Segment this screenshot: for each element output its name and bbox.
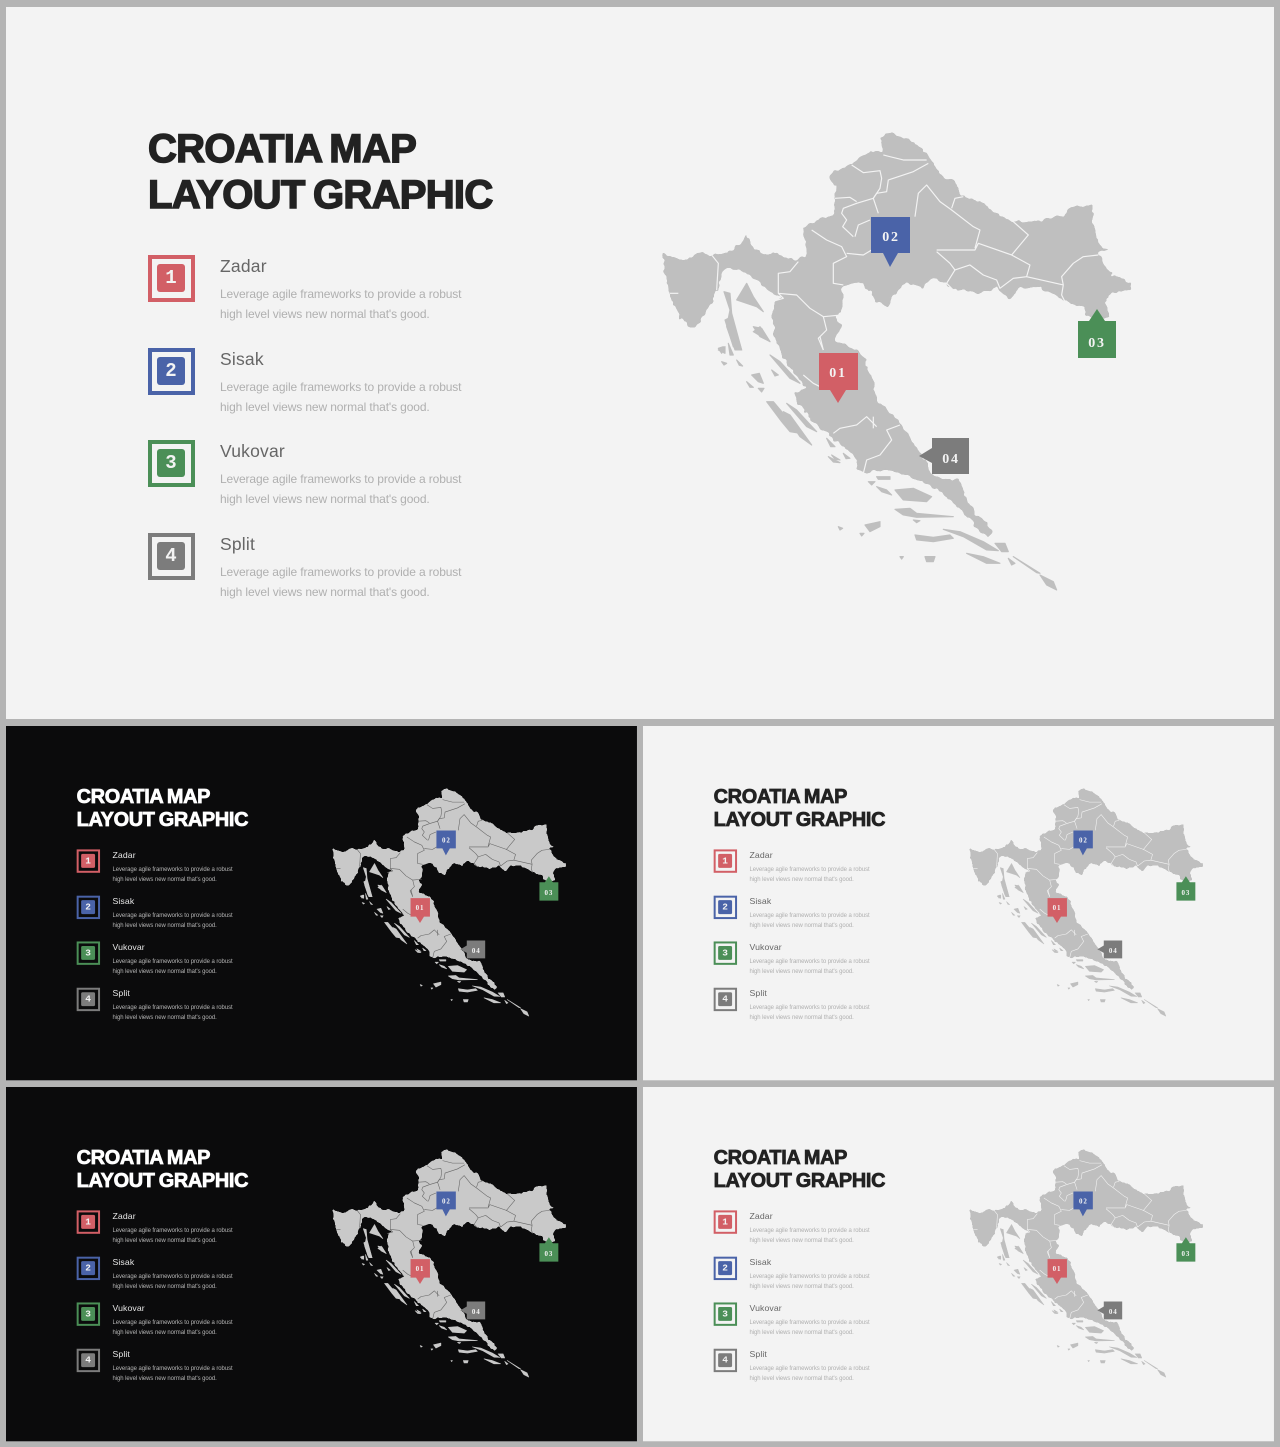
list item: Split: 4 <box>722 994 728 1005</box>
list item: Split: Leverage agile frameworks to provide a robust <box>749 1364 870 1371</box>
panel: dark slide bottom left <box>6 1086 637 1441</box>
title: CROATIA MAP <box>714 786 847 808</box>
list item: Sisak <box>148 348 462 414</box>
map of Croatia <box>970 788 1203 1016</box>
list item: Split: 4 <box>165 545 177 567</box>
pin 01 <box>1048 1259 1067 1284</box>
pin 04 <box>919 438 969 474</box>
list item: Sisak: Sisak <box>749 1257 771 1267</box>
list item: Sisak: Sisak <box>112 896 134 906</box>
list item: Vukovar: 3 <box>722 1308 728 1319</box>
list item: Split: high level views new normal that's good. <box>749 1374 854 1381</box>
title: CROATIA MAP <box>148 127 416 171</box>
list item: Sisak: 2 <box>722 902 728 913</box>
list item: Sisak: Leverage agile frameworks to provide a robust <box>749 912 870 919</box>
list item: Sisak <box>76 1256 233 1290</box>
pin 01: 01 <box>829 366 847 381</box>
list item: Split: 4 <box>85 994 91 1005</box>
list item: Vukovar: 3 <box>85 947 91 958</box>
pin 04: 04 <box>942 452 960 467</box>
title: LAYOUT GRAPHIC <box>148 173 493 217</box>
list item: Zadar: high level views new normal that's good. <box>749 1236 854 1243</box>
pin 02: 02 <box>1079 1197 1088 1205</box>
map of Croatia <box>970 1150 1203 1378</box>
list item: Vukovar: high level views new normal that's good. <box>112 1328 217 1335</box>
list item: Zadar: Leverage agile frameworks to provide a robust <box>749 865 870 872</box>
list item: Split <box>76 988 233 1020</box>
list item: Zadar <box>714 1210 870 1244</box>
list item: Vukovar <box>714 1302 870 1336</box>
pin 01: 01 <box>1053 904 1061 912</box>
list item: Zadar: Zadar <box>112 1210 136 1220</box>
list item: Vukovar <box>76 1302 233 1336</box>
pin 02 <box>436 830 456 855</box>
title: CROATIA MAP <box>77 1146 210 1168</box>
pin 02 <box>1073 830 1093 855</box>
list item: Split: high level views new normal that's good. <box>220 585 430 599</box>
pin 02: 02 <box>442 1197 451 1205</box>
title: CROATIA MAP <box>77 786 210 808</box>
list item: Sisak: 2 <box>165 360 177 382</box>
pin 03 <box>539 876 558 901</box>
list item: Split: Leverage agile frameworks to provide a robust <box>749 1004 870 1011</box>
list item: Vukovar: high level views new normal that's good. <box>112 967 217 974</box>
title <box>714 786 886 830</box>
list item: Sisak: high level views new normal that's good. <box>749 921 854 928</box>
list item: Vukovar: Vukovar <box>220 441 285 461</box>
list item: Zadar <box>148 255 462 321</box>
list item: Zadar <box>76 849 233 882</box>
list item: Vukovar <box>148 440 462 506</box>
list item: Vukovar <box>714 941 870 974</box>
title <box>77 1146 248 1191</box>
list item: Split: 4 <box>722 1354 728 1365</box>
list item: Vukovar: 3 <box>85 1308 91 1319</box>
list item: Sisak: 2 <box>85 902 91 913</box>
pin 03: 03 <box>1088 336 1106 351</box>
list item: Zadar: Leverage agile frameworks to provide a robust <box>112 865 233 872</box>
pin 04: 04 <box>1109 947 1118 955</box>
title: LAYOUT GRAPHIC <box>77 809 248 830</box>
map of Croatia <box>662 132 1131 590</box>
list item: Split: Split <box>749 1349 767 1359</box>
list item: Vukovar: Vukovar <box>112 1302 145 1312</box>
list item: Vukovar: Vukovar <box>749 942 782 952</box>
list item: Sisak: Leverage agile frameworks to provide a robust <box>112 912 233 919</box>
title: CROATIA MAP <box>714 1146 847 1168</box>
list item: Zadar: 1 <box>722 1216 728 1227</box>
list item: Vukovar: Vukovar <box>112 942 145 952</box>
pin 02: 02 <box>1079 836 1088 844</box>
list item: Vukovar: Leverage agile frameworks to provide a robust <box>220 472 461 486</box>
list item: Zadar: 1 <box>85 1216 91 1227</box>
title: LAYOUT GRAPHIC <box>714 809 885 830</box>
list item: Zadar <box>76 1210 233 1244</box>
list item: Split: Leverage agile frameworks to provide a robust <box>112 1364 233 1371</box>
list item: Zadar: Zadar <box>749 1210 773 1220</box>
list item: Split: Split <box>112 1349 130 1359</box>
pin 01: 01 <box>416 1265 424 1273</box>
list item: Sisak: high level views new normal that's good. <box>112 921 217 928</box>
pin 03 <box>1176 876 1195 901</box>
list item: Zadar: Zadar <box>220 256 267 276</box>
list item: Sisak <box>714 1256 870 1290</box>
list item: Split <box>714 1348 870 1382</box>
list item: Sisak: high level views new normal that's good. <box>112 1282 217 1289</box>
list item: Zadar: high level views new normal that's good. <box>112 1236 217 1243</box>
panel: dark slide top left <box>6 726 637 1080</box>
pin 01 <box>1048 898 1067 923</box>
list item: Split <box>76 1348 233 1382</box>
list item: Sisak <box>714 896 870 928</box>
pin 03: 03 <box>1182 889 1190 897</box>
list item: Vukovar: 3 <box>722 947 728 958</box>
list item: Split <box>714 988 870 1020</box>
pin 02: 02 <box>882 230 900 245</box>
list item: Zadar: Zadar <box>749 850 773 860</box>
list item: Vukovar: high level views new normal that's good. <box>749 967 854 974</box>
list item: Zadar: high level views new normal that's good. <box>112 875 217 882</box>
pin 03: 03 <box>545 889 553 897</box>
title <box>714 1146 886 1191</box>
list item: Vukovar <box>76 941 233 974</box>
list item: Split <box>148 533 462 599</box>
list item: Vukovar: high level views new normal that's good. <box>749 1328 854 1335</box>
pin 04: 04 <box>472 1307 481 1315</box>
list item: Split: high level views new normal that's good. <box>112 1013 217 1020</box>
map of Croatia <box>332 788 566 1016</box>
list item: Split: high level views new normal that's good. <box>112 1374 217 1381</box>
pin 04: 04 <box>472 947 481 955</box>
list item: Split: Split <box>112 988 130 998</box>
panel: main slide <box>6 7 1274 719</box>
list item: Zadar: Leverage agile frameworks to provide a robust <box>220 287 461 301</box>
pin 01: 01 <box>1053 1265 1061 1273</box>
pin 02 <box>1073 1191 1093 1216</box>
pin 01 <box>819 353 858 403</box>
pin 02 <box>436 1191 456 1216</box>
pin 03 <box>1176 1237 1195 1261</box>
list item: Sisak: Leverage agile frameworks to provide a robust <box>112 1272 233 1279</box>
list item: Split: Split <box>220 534 255 554</box>
list item: Split: Leverage agile frameworks to provide a robust <box>220 565 461 579</box>
list item: Zadar: 1 <box>722 855 728 866</box>
list item: Sisak: 2 <box>722 1262 728 1273</box>
pin 01 <box>411 1259 430 1284</box>
title <box>77 786 248 830</box>
list item: Vukovar: Leverage agile frameworks to provide a robust <box>749 1318 870 1325</box>
list item: Split: Split <box>749 988 767 998</box>
title <box>148 127 494 217</box>
list item: Sisak: Leverage agile frameworks to provide a robust <box>749 1272 870 1279</box>
list item: Zadar: high level views new normal that's good. <box>220 307 430 321</box>
pin 04 <box>1097 1301 1122 1319</box>
list item: Split: 4 <box>85 1354 91 1365</box>
map of Croatia <box>332 1150 566 1378</box>
list item: Zadar: 1 <box>165 267 177 289</box>
pin 01: 01 <box>416 904 424 912</box>
list item: Zadar <box>714 849 870 882</box>
pin 04 <box>1097 940 1122 958</box>
pin 04 <box>460 1301 485 1319</box>
list item: Vukovar: Leverage agile frameworks to provide a robust <box>749 957 870 964</box>
pin 03: 03 <box>545 1250 553 1258</box>
list item: Sisak: Sisak <box>220 349 264 369</box>
list item: Vukovar: Leverage agile frameworks to provide a robust <box>112 1318 233 1325</box>
list item: Vukovar: Vukovar <box>749 1302 782 1312</box>
list item: Vukovar: 3 <box>165 452 177 474</box>
list item: Sisak: Sisak <box>749 896 771 906</box>
list item: Zadar: Zadar <box>112 850 136 860</box>
pin 03 <box>539 1237 558 1261</box>
pin 04: 04 <box>1109 1307 1118 1315</box>
title: LAYOUT GRAPHIC <box>714 1169 885 1191</box>
list item: Sisak: high level views new normal that's good. <box>220 400 430 414</box>
title: LAYOUT GRAPHIC <box>77 1169 248 1191</box>
panel: light slide top right <box>643 726 1274 1080</box>
list item: Zadar: high level views new normal that's good. <box>749 875 854 882</box>
pin 01 <box>411 898 430 923</box>
list item: Zadar: 1 <box>85 855 91 866</box>
list item: Zadar: Leverage agile frameworks to provide a robust <box>749 1226 870 1233</box>
list item: Sisak: 2 <box>85 1262 91 1273</box>
pin 02 <box>871 217 910 267</box>
list item: Vukovar: high level views new normal that's good. <box>220 492 430 506</box>
pin 04 <box>460 940 485 958</box>
pin 03: 03 <box>1182 1250 1190 1258</box>
list item: Split: Leverage agile frameworks to provide a robust <box>112 1004 233 1011</box>
pin 02: 02 <box>442 836 451 844</box>
list item: Sisak: Sisak <box>112 1257 134 1267</box>
list item: Sisak <box>76 896 233 928</box>
list item: Vukovar: Leverage agile frameworks to provide a robust <box>112 957 233 964</box>
panel: light slide bottom right <box>643 1086 1274 1441</box>
list item: Sisak: Leverage agile frameworks to provide a robust <box>220 380 461 394</box>
list item: Sisak: high level views new normal that's good. <box>749 1282 854 1289</box>
pin 03 <box>1078 309 1116 358</box>
list item: Zadar: Leverage agile frameworks to provide a robust <box>112 1226 233 1233</box>
list item: Split: high level views new normal that's good. <box>749 1013 854 1020</box>
